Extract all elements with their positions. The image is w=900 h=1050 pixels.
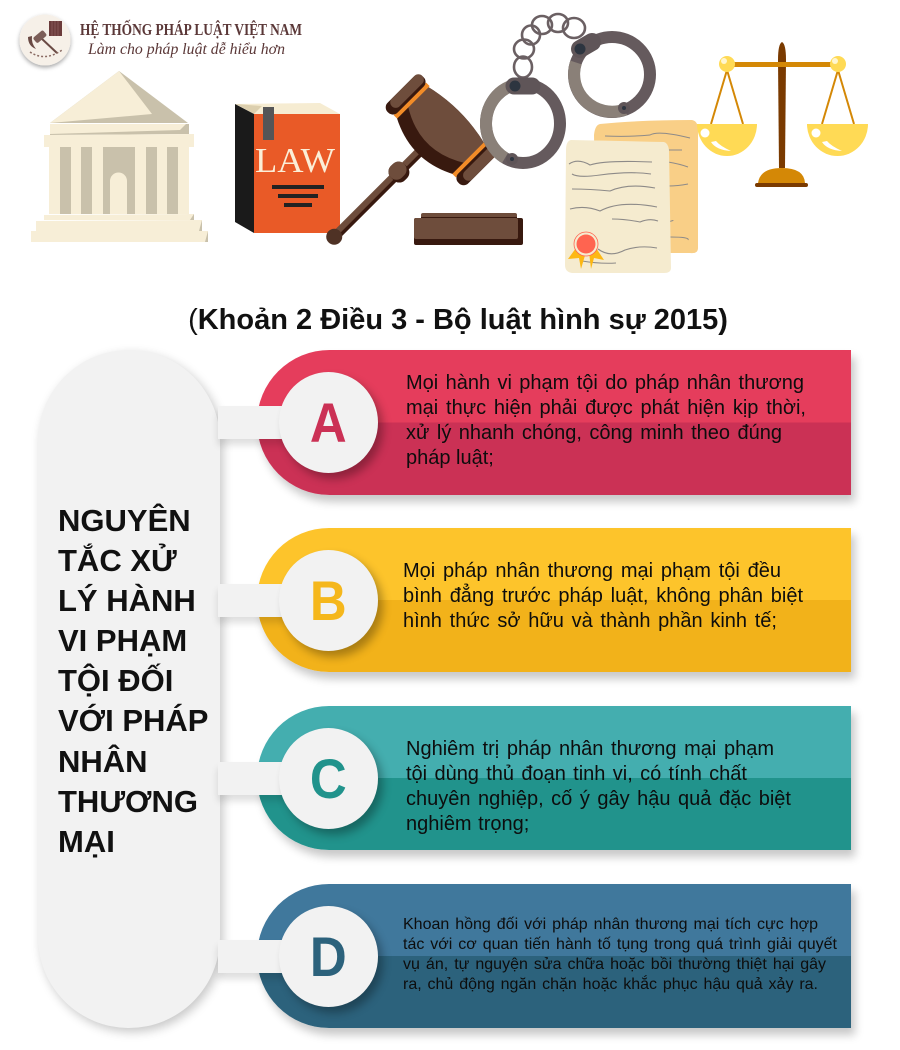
main heading: NHÂN: [58, 744, 148, 779]
icon: courthouse: [31, 71, 208, 242]
badge C: C: [310, 747, 347, 810]
connector B: [218, 584, 290, 617]
text C: tội dùng thủ đoạn tinh vi, có tính chất: [406, 763, 747, 785]
text C: chuyên nghiệp, cố ý gây hậu quả đặc biệt: [406, 788, 791, 810]
illustrations banner: [17, 12, 868, 273]
main heading: TẮC XỬ: [58, 543, 177, 578]
main heading: THƯƠNG: [58, 784, 198, 819]
badge D: D: [310, 925, 347, 988]
text D: vụ án, tự nguyện sửa chữa hoặc bồi thường thiệt hại gây: [403, 956, 826, 973]
icon: documents with seal: [565, 120, 698, 273]
badge A: [279, 372, 378, 473]
text D: Khoan hồng đối với pháp nhân thương mại tích cực hợp: [403, 916, 818, 933]
logo slogan: Làm cho pháp luật dễ hiểu hơn: [87, 41, 285, 58]
panel: principle B: [216, 528, 860, 684]
main heading: VI PHẠM: [58, 623, 187, 658]
text A: Mọi hành vi phạm tội do pháp nhân thương: [406, 372, 804, 394]
badge B: [279, 550, 378, 651]
bar B: [257, 528, 851, 672]
main heading: NGUYÊN: [58, 503, 191, 538]
main heading: VỚI PHÁP: [58, 703, 208, 738]
badge D: [279, 906, 378, 1007]
text A: mại thực hiện phải được phát hiện kịp thời,: [406, 397, 806, 419]
text C: nghiêm trọng;: [406, 813, 529, 835]
panel: principle C: [216, 706, 860, 862]
main heading: [58, 503, 208, 859]
badge C: [279, 728, 378, 829]
text D: tác với cơ quan tiến hành tố tụng trong quá trình giải quyết: [403, 936, 837, 953]
panel: left title pill: [38, 350, 220, 1028]
legal reference heading: (Khoản 2 Điều 3 - Bộ luật hình sự 2015): [188, 304, 728, 336]
text A: xử lý nhanh chóng, công minh theo đúng: [406, 422, 782, 444]
icon: law book: [235, 103, 340, 233]
text C: Nghiêm trị pháp nhân thương mại phạm: [406, 738, 774, 760]
panel: principle A: [216, 350, 860, 506]
bar A: [257, 350, 851, 495]
text B: [403, 560, 803, 632]
text A: [406, 372, 806, 469]
connector D: [218, 940, 290, 973]
icon: logo emblem: [20, 14, 70, 66]
text D: ra, chủ động ngăn chặn hoặc khắc phục hậu quả xảy ra.: [403, 976, 818, 993]
text B: hình thức sở hữu và thành phần kinh tế;: [403, 610, 777, 632]
bar C: [257, 706, 851, 850]
icon: scales of justice: [697, 42, 868, 187]
main heading: LÝ HÀNH: [58, 583, 196, 618]
main heading: MẠI: [58, 824, 115, 859]
badge A: A: [310, 391, 347, 454]
connector C: [218, 762, 290, 795]
text A: pháp luật;: [406, 447, 494, 469]
bar D: [257, 884, 851, 1028]
connector A: [218, 406, 290, 439]
icon: handcuffs: [486, 14, 650, 165]
text D: [403, 916, 837, 993]
panel: principle D: [216, 884, 860, 1040]
text B: bình đẳng trước pháp luật, không phân biệt: [403, 585, 803, 607]
icon: gavel: [288, 71, 523, 283]
badge B: B: [310, 569, 347, 632]
main heading: TỘI ĐỐI: [58, 663, 173, 698]
text B: Mọi pháp nhân thương mại phạm tội đều: [403, 560, 781, 582]
logo title: HỆ THỐNG PHÁP LUẬT VIỆT NAM: [80, 19, 302, 39]
text C: [406, 738, 791, 835]
icon: law book: LAW: [255, 141, 335, 180]
